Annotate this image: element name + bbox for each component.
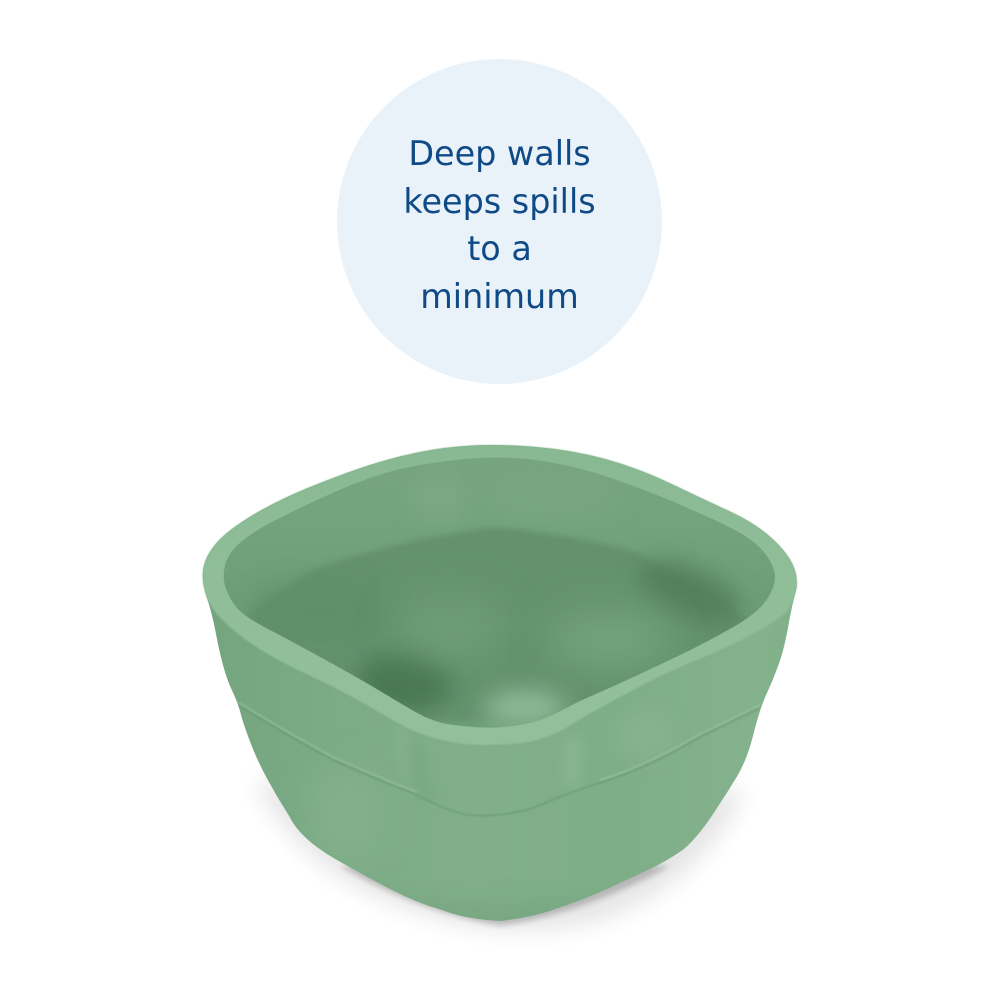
callout text bbox=[403, 134, 596, 316]
band step line bbox=[238, 705, 760, 816]
bowl rim bbox=[203, 445, 797, 745]
callout text: to a bbox=[467, 229, 532, 268]
floor centre highlight bbox=[410, 608, 478, 668]
dark floor shade right bbox=[642, 554, 743, 624]
callout text: Deep walls bbox=[408, 134, 591, 173]
bowl contact shadow bbox=[340, 866, 670, 926]
band step highlight bbox=[238, 702, 760, 792]
bowl outer body bbox=[190, 440, 810, 947]
top wall highlight bbox=[412, 475, 468, 519]
bowl interior bbox=[224, 458, 775, 728]
body light patch bbox=[310, 765, 380, 865]
band right highlight bbox=[570, 752, 574, 772]
body base shade bbox=[442, 910, 546, 921]
floor front highlight bbox=[558, 612, 662, 668]
green bowl bbox=[202, 444, 798, 934]
callout text: minimum bbox=[420, 276, 579, 316]
band fold shadow bbox=[418, 745, 430, 800]
callout circle bbox=[337, 59, 662, 384]
callout text: keeps spills bbox=[403, 182, 596, 220]
bowl floor bbox=[235, 527, 750, 720]
spout inner highlight bbox=[483, 690, 567, 726]
left floor shade bbox=[268, 594, 269, 595]
band fold highlight bbox=[402, 728, 408, 780]
dark floor shade left bbox=[357, 652, 453, 712]
bowl soft shadow bbox=[255, 780, 745, 930]
